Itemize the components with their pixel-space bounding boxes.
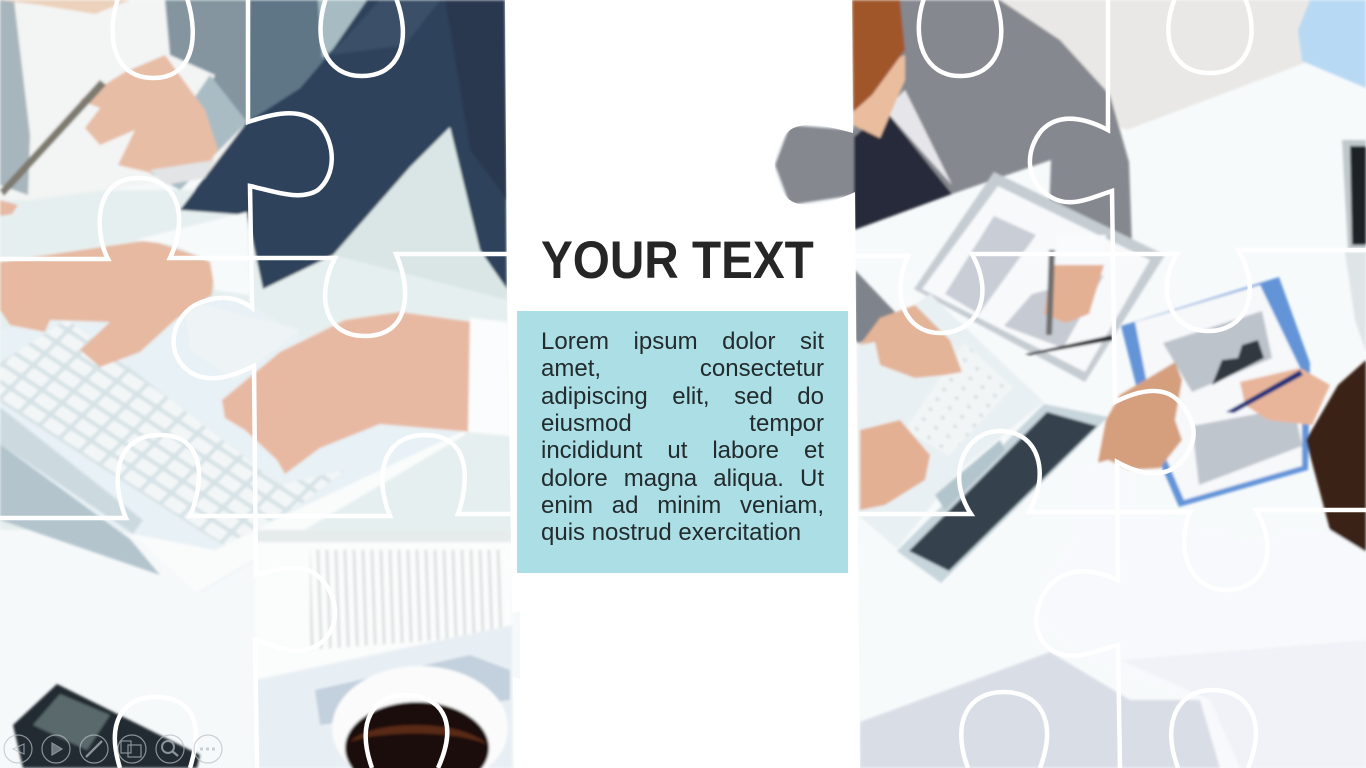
woman's shirt and jacket [0,0,250,200]
hand on folder [1098,362,1182,470]
body text: quis nostrud exercitation [541,519,801,546]
tablet [897,404,1108,583]
left hand on laptop [860,305,962,378]
wall top [1003,0,1310,130]
laptop body [122,530,222,550]
typing hand right [222,312,472,474]
body text: incididunt ut labore et [541,437,824,464]
body text: eiusmod tempor [541,410,824,437]
presentation controls [4,735,222,763]
document [258,530,511,542]
hand with pen [80,55,218,175]
wall bottom [860,652,1230,768]
far laptop [1342,140,1366,250]
hair and face [853,55,905,138]
clipboard document [914,172,1165,382]
blue folder [1121,277,1310,507]
panel: left photo [0,0,520,768]
body text: amet, consectetur [541,355,824,382]
phone [13,684,200,768]
body text: enim ad minim veniam, [541,492,824,519]
left grey sleeve [855,270,895,345]
outlines: right panel [855,0,1366,768]
cuff and writing hand [1100,234,1107,239]
typing hand left [0,240,215,367]
white shirt [1098,458,1366,768]
panel: right photo [770,0,1366,768]
grey suit [775,0,1132,245]
body text: adipiscing elit, sed do [541,383,824,410]
dark suit sleeve [180,0,507,289]
pen hand [1240,368,1330,425]
outlines: left panel [0,0,511,768]
table surface [0,190,520,530]
body text [541,328,824,546]
sleeve top right [1298,0,1366,88]
title: YOUR TEXT [541,231,814,290]
white laptop [857,294,1044,549]
wall behind arm [333,127,507,300]
coffee cup [332,666,508,768]
body text: Lorem ipsum dolor sit [541,328,824,355]
hair [1306,360,1366,552]
body text: dolore magna aliqua. Ut [541,465,824,492]
text panel [517,311,848,573]
